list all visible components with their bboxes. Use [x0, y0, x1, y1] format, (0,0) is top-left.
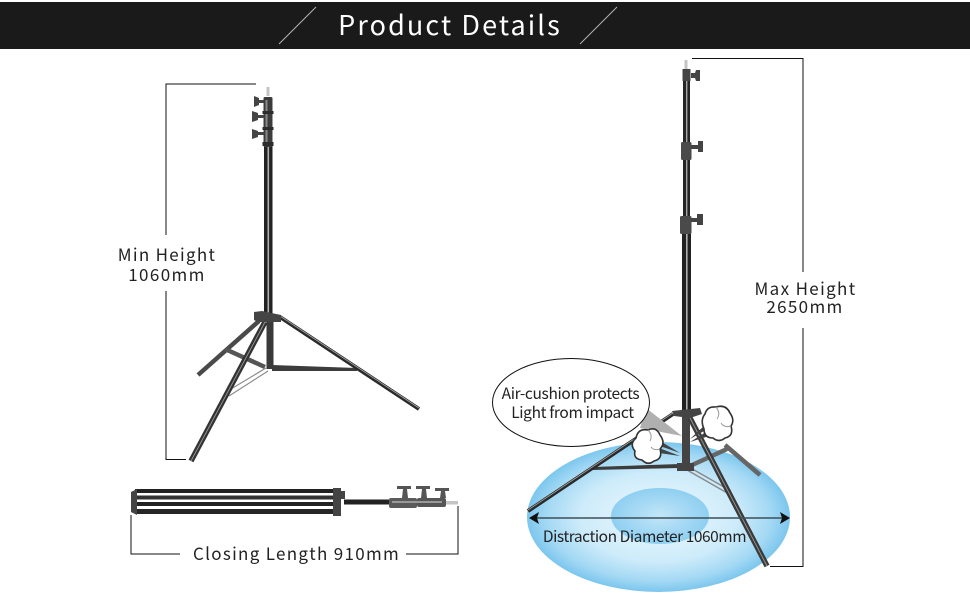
label: min height: Min Height	[118, 241, 216, 266]
stud	[266, 87, 270, 96]
callout: air cushion: Light from impact	[511, 401, 634, 423]
floor diameter ellipses	[527, 442, 790, 592]
right leg	[280, 317, 419, 409]
back leg	[725, 445, 760, 475]
hub	[672, 408, 702, 418]
dimension bracket: max height	[692, 58, 856, 566]
pole	[264, 145, 272, 315]
title: Product Details	[338, 4, 562, 43]
center post	[682, 416, 690, 466]
spreaders	[593, 464, 680, 470]
collars and knobs	[682, 69, 690, 81]
callout text: Air-cushion protects	[502, 382, 639, 404]
dimension bracket: min height	[118, 84, 256, 460]
knobs	[258, 100, 264, 135]
collars	[264, 97, 272, 147]
front leg	[690, 418, 767, 566]
pole	[683, 70, 690, 220]
icon: left air puff	[632, 429, 680, 463]
hub	[254, 311, 281, 322]
knobs	[397, 486, 449, 498]
label: closing length: Closing Length 910mm	[193, 540, 400, 565]
back leg	[198, 321, 259, 375]
left leg	[528, 414, 673, 511]
left stand: extended at minimum height	[191, 87, 419, 461]
icon: right air puff	[690, 406, 733, 442]
stud	[446, 501, 458, 504]
dimension bracket: min height: 1060mm	[128, 261, 206, 286]
arrow: diameter	[529, 512, 790, 524]
center post	[266, 320, 274, 369]
struts	[226, 368, 268, 396]
right stand: extended at maximum height	[528, 60, 767, 566]
folded stand	[131, 486, 458, 516]
callout: air cushion	[492, 358, 682, 446]
front leg	[191, 322, 265, 461]
spreader right	[272, 365, 357, 371]
label: distraction diameter: Distraction Diameter 1060mm	[543, 525, 746, 547]
stud	[684, 60, 688, 70]
label: max height: Max Height	[755, 275, 856, 300]
dimension bracket: closing length	[131, 506, 458, 565]
dimension bracket: max height: 2650mm	[766, 293, 844, 318]
header banner	[0, 2, 970, 49]
